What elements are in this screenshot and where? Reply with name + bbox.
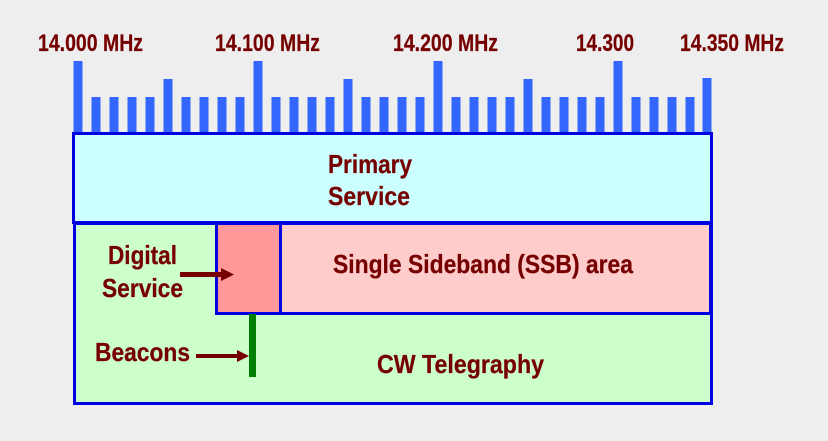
panel: CW telegraphy band xyxy=(74,224,712,404)
panel: primary service band xyxy=(74,134,712,222)
digital service label: Service xyxy=(102,273,183,303)
arrow: digital service xyxy=(180,268,234,281)
frequency labels: 14.200 MHz xyxy=(393,30,498,57)
beacons marker line xyxy=(249,314,256,377)
digital service label: Digital xyxy=(108,240,177,270)
frequency labels: 14.000 MHz xyxy=(38,30,143,57)
CW telegraphy label: CW Telegraphy xyxy=(377,349,544,379)
primary service label xyxy=(328,149,412,211)
primary service label: Primary xyxy=(328,149,412,179)
beacons label: Beacons xyxy=(95,337,190,367)
arrow: beacons xyxy=(196,350,249,362)
frequency labels: 14.300 xyxy=(576,30,634,57)
frequency labels xyxy=(38,30,784,57)
frequency scale bars xyxy=(74,61,712,133)
frequency labels: 14.100 MHz xyxy=(215,30,320,57)
digital service label xyxy=(102,240,183,303)
frequency labels: 14.350 MHz xyxy=(680,30,784,57)
panel: digital service block xyxy=(216,224,280,314)
primary service label: Service xyxy=(328,181,410,211)
panel: single sideband area xyxy=(280,224,710,314)
SSB label: Single Sideband (SSB) area xyxy=(333,249,633,279)
